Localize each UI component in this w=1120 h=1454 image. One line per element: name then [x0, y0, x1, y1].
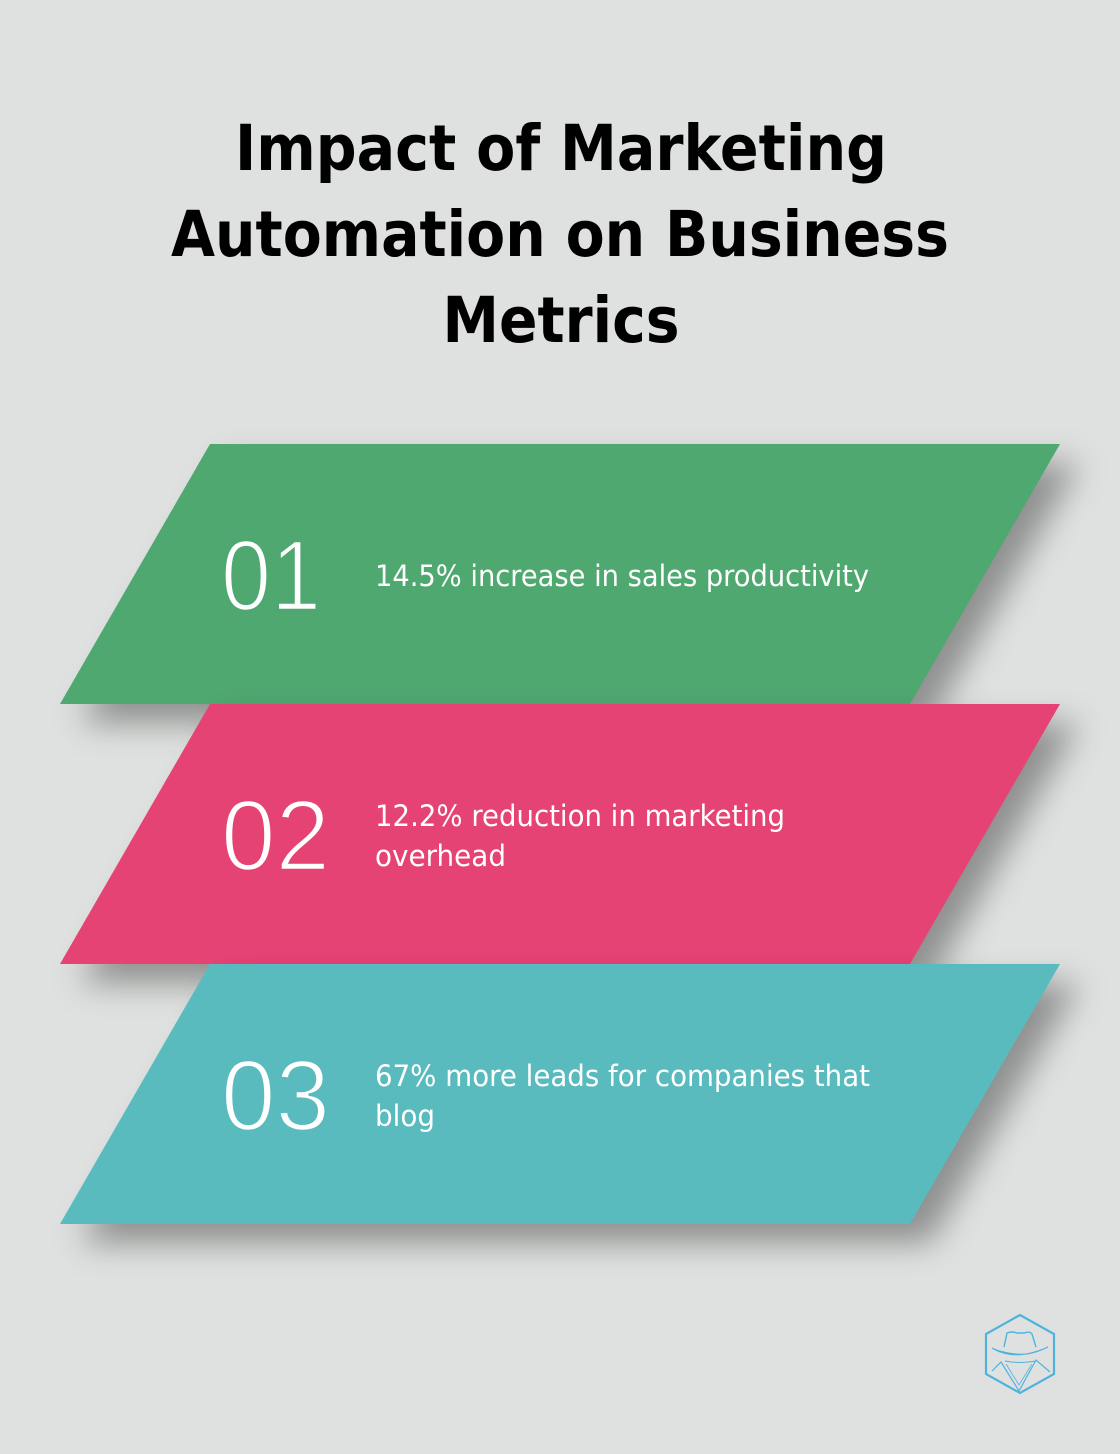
title: Automation on Business [171, 198, 949, 271]
text: step 03 [375, 1059, 870, 1133]
title [171, 112, 949, 357]
icon: hexagon logo with hat [986, 1315, 1054, 1393]
panel: step 01 [60, 444, 1079, 723]
number 03: 03 [221, 1040, 330, 1152]
panel: step 02 [60, 704, 1079, 983]
text: step 02 [375, 799, 785, 873]
text: step 01: 14.5% increase in sales productivity [375, 559, 869, 593]
number 01: 01 [221, 520, 321, 632]
text: step 02: overhead [375, 839, 506, 873]
title: Impact of Marketing [235, 112, 887, 185]
panel: step 03 [60, 964, 1079, 1243]
title: Metrics [442, 284, 680, 357]
text: step 02: 12.2% reduction in marketing [375, 799, 785, 833]
text: step 03: 67% more leads for companies that [375, 1059, 870, 1093]
number 02: 02 [221, 780, 330, 892]
text: step 03: blog [375, 1099, 435, 1133]
